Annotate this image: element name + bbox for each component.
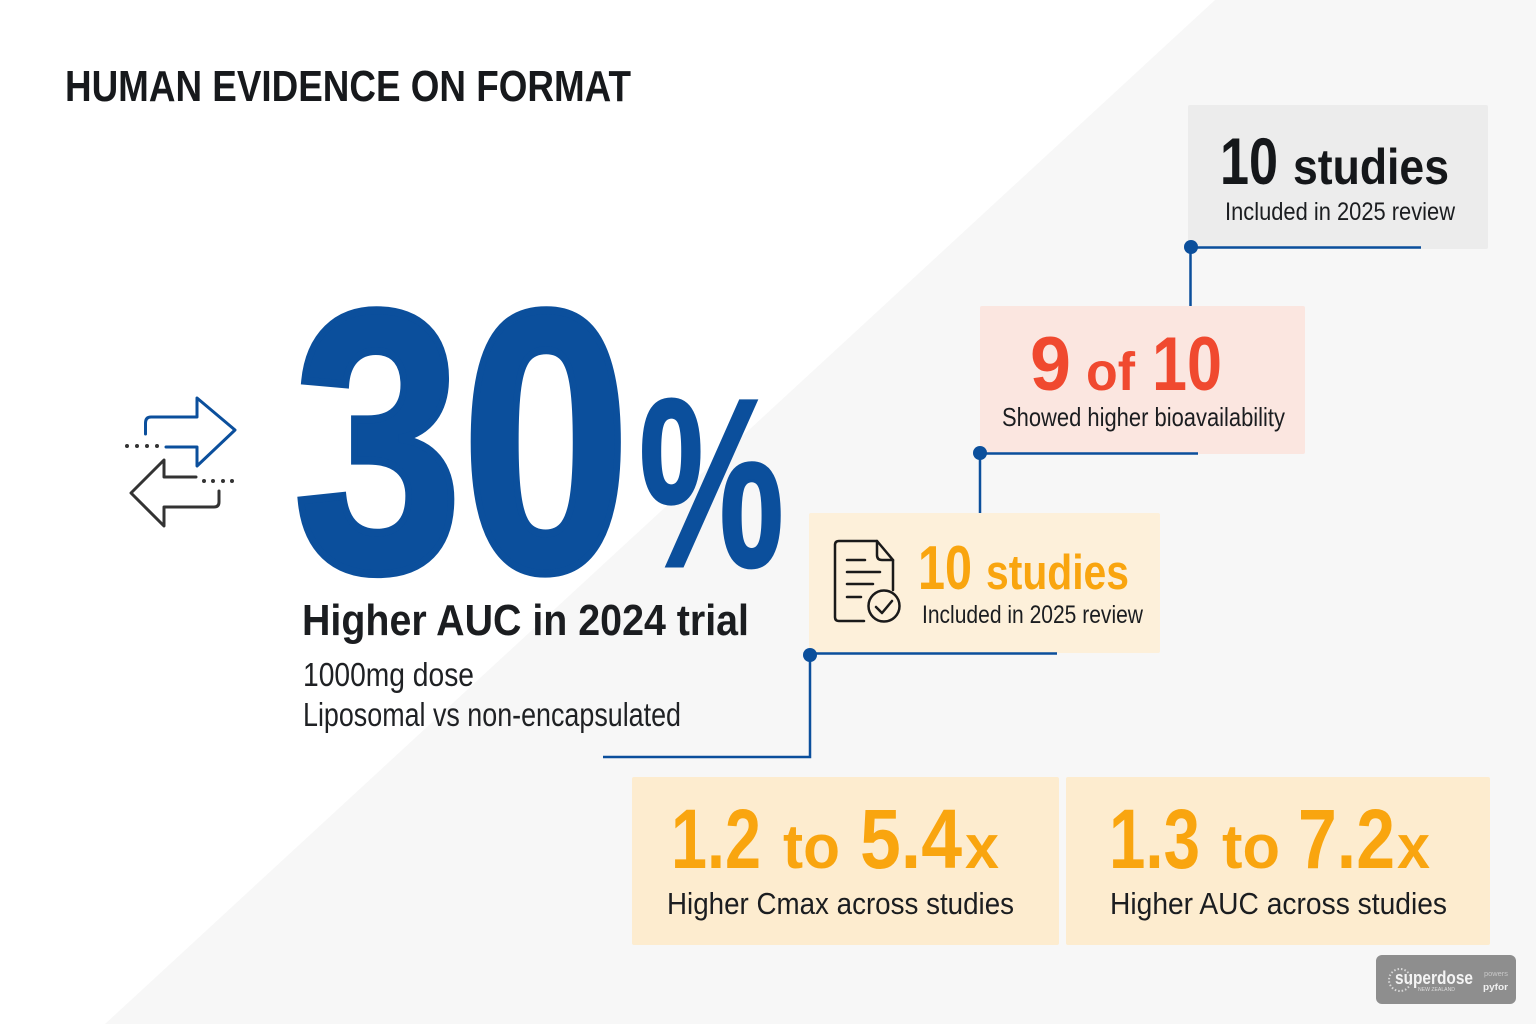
panel: 9 of 10 xyxy=(980,306,1305,454)
panel: AUC range: Higher AUC across studies xyxy=(1110,886,1447,921)
logo badge xyxy=(1376,955,1516,1004)
stat label: Higher AUC in 2024 trial xyxy=(302,596,749,645)
stat detail: 1000mg dose xyxy=(303,656,474,693)
panel: AUC range: x xyxy=(1397,813,1430,882)
panel: 10 studies amber xyxy=(809,513,1160,653)
panel: AUC range xyxy=(1066,777,1490,945)
headline stat xyxy=(294,233,784,733)
icon: swap arrows xyxy=(125,398,235,526)
title: HUMAN EVIDENCE ON FORMAT xyxy=(65,62,631,111)
big number 30%: 30 xyxy=(294,233,630,649)
panel: AUC range: 7.2 xyxy=(1298,792,1395,886)
panel: AUC range: 1.3 xyxy=(1109,792,1200,886)
panel: 9 of 10: 10 xyxy=(1152,322,1222,407)
logo badge: powers xyxy=(1484,971,1509,978)
panel: Cmax range: x xyxy=(965,813,1000,882)
stat detail xyxy=(303,656,681,733)
panel: 10 studies amber: studies xyxy=(986,546,1129,600)
big number 30%: % xyxy=(639,349,784,617)
panel: 10 studies top: 10 xyxy=(1220,124,1278,198)
panel: Cmax range xyxy=(632,777,1059,945)
panel: Cmax range: to xyxy=(783,813,840,882)
panel: Cmax range: 5.4 xyxy=(860,792,962,886)
stat detail: Liposomal vs non-encapsulated xyxy=(303,696,681,733)
logo badge: NEW ZEALAND xyxy=(1418,987,1455,993)
panel: 9 of 10: 9 xyxy=(1030,322,1071,407)
panel: 10 studies amber: Included in 2025 review xyxy=(922,601,1144,629)
logo badge: superdose xyxy=(1395,968,1473,988)
panel: 9 of 10: of xyxy=(1086,342,1136,402)
panel: AUC range: to xyxy=(1222,813,1280,882)
panel: 10 studies top xyxy=(1188,105,1488,249)
panel: 10 studies top: studies xyxy=(1293,139,1449,195)
panel: Cmax range: 1.2 xyxy=(671,792,761,886)
logo badge: pyfor xyxy=(1483,982,1509,992)
panel: 9 of 10: Showed higher bioavailability xyxy=(1002,402,1285,432)
connector: steps xyxy=(603,240,1421,757)
panel: 10 studies top: Included in 2025 review xyxy=(1225,198,1456,226)
panel: 10 studies amber: 10 xyxy=(918,534,972,603)
panel: Cmax range: Higher Cmax across studies xyxy=(667,886,1014,921)
icon: document with check xyxy=(835,541,900,622)
